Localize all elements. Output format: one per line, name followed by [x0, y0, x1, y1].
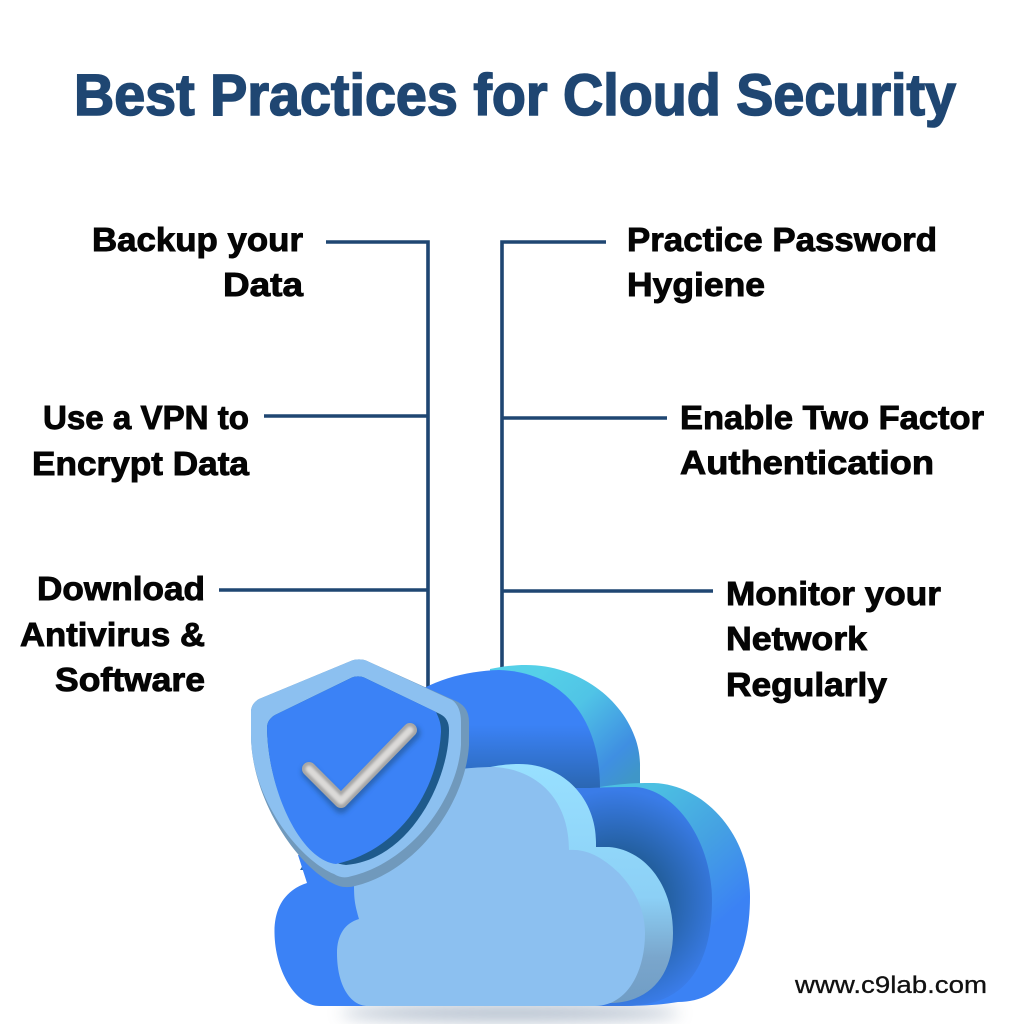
- back cloud: top lobe face: [300, 670, 600, 870]
- check mark: drop shadow: [309, 733, 413, 806]
- label: Backup your Data: Backup your: [92, 221, 303, 258]
- label: Download Antivirus & Software: Antivirus &: [20, 616, 205, 653]
- label: Monitor your Network Regularly: Regularly: [726, 666, 888, 703]
- label: Monitor your Network Regularly: Monitor your: [726, 575, 941, 612]
- back cloud: right lobe face: [560, 787, 712, 1006]
- connector lines: left trunk: [219, 242, 428, 692]
- label: Download Antivirus & Software: Download: [37, 570, 205, 607]
- back cloud: top lobe side depth: [490, 665, 640, 790]
- icon: check mark: [309, 730, 413, 806]
- title: Best Practices for Cloud Security: [74, 63, 956, 128]
- label: Practice Password Hygiene: Practice Password: [627, 221, 937, 258]
- label: Enable Two Factor Authentication: Enable Two Factor: [680, 399, 984, 436]
- illustration: cloud with security shield: [251, 659, 750, 1021]
- label: Practice Password Hygiene: Hygiene: [627, 266, 765, 303]
- ground shadow: [340, 1005, 680, 1021]
- check mark: silver body: [309, 730, 410, 801]
- front cloud: face: [337, 767, 645, 1006]
- shield: light rim: [251, 659, 461, 877]
- shield: outer bevel: [251, 659, 469, 887]
- front cloud: side depth: [480, 764, 673, 1006]
- label: Use a VPN to Encrypt Data: [32, 399, 250, 482]
- shield: [251, 659, 469, 887]
- shield: inner shadow: [267, 676, 449, 865]
- back cloud: left lobe: [274, 840, 600, 1006]
- check mark: highlight: [309, 730, 410, 801]
- shield: inner blue face: [267, 676, 441, 864]
- label: Use a VPN to Encrypt Data: Use a VPN to: [43, 399, 249, 436]
- label: Download Antivirus & Software: Software: [55, 661, 205, 698]
- label: Download Antivirus & Software: [20, 570, 205, 698]
- label: Practice Password Hygiene: [627, 221, 937, 303]
- back cloud: right lobe side depth: [600, 783, 750, 1006]
- label: Use a VPN to Encrypt Data: Encrypt Data: [32, 445, 250, 482]
- label: Monitor your Network Regularly: Network: [726, 620, 868, 657]
- website url: www.c9lab.com: [794, 972, 987, 999]
- label: Backup your Data: Data: [223, 266, 304, 303]
- label: Backup your Data: [92, 221, 304, 303]
- label: Monitor your Network Regularly: [726, 575, 941, 703]
- label: Enable Two Factor Authentication: [680, 399, 984, 481]
- connector lines: right trunk: [502, 242, 713, 672]
- label: Enable Two Factor Authentication: Authentication: [680, 444, 934, 481]
